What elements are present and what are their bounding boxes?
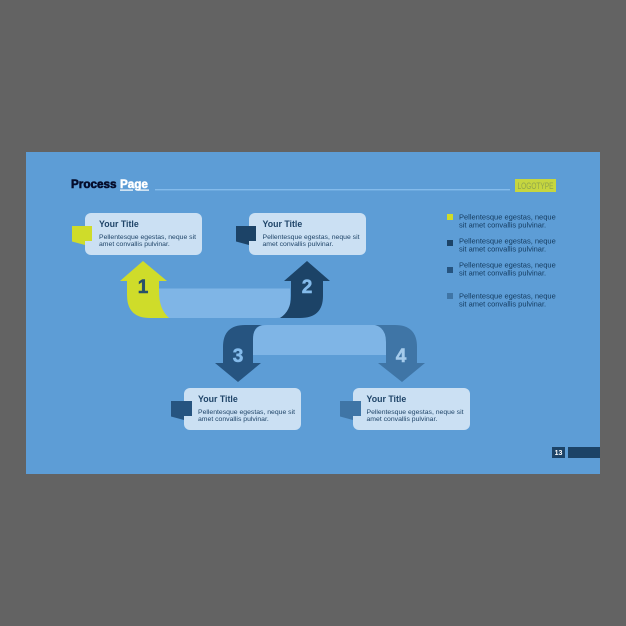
card 1: Your Title xyxy=(99,219,139,229)
card 2: Pellentesque egestas, neque sit xyxy=(262,234,360,241)
card 1: amet convallis pulvinar. xyxy=(99,241,170,248)
arrow 4: 4 xyxy=(396,346,407,367)
arrow 4 xyxy=(375,325,425,382)
title: Page xyxy=(120,178,148,191)
card 3 xyxy=(171,388,301,430)
card 2: amet convallis pulvinar. xyxy=(262,241,333,248)
arrow 2 xyxy=(280,261,330,318)
arrow 3: 3 xyxy=(233,346,243,367)
legend item 4: Pellentesque egestas, neque xyxy=(459,292,556,300)
arrow 3 xyxy=(215,325,262,382)
logotype badge: LOGOTYPE xyxy=(518,181,554,192)
arrow 1: 1 xyxy=(138,277,149,298)
title: Process xyxy=(71,178,117,191)
legend item 1 xyxy=(447,212,556,230)
card 1 xyxy=(72,213,202,255)
card 4: Pellentesque egestas, neque sit xyxy=(366,409,464,416)
legend item 1: sit amet convallis pulvinar. xyxy=(459,220,546,230)
flag icon 1 xyxy=(72,226,92,245)
footer bar xyxy=(568,447,600,458)
legend item 3: sit amet convallis pulvinar. xyxy=(459,268,546,278)
logotype badge xyxy=(515,179,556,192)
card 2 xyxy=(236,213,366,255)
legend item 2 xyxy=(447,236,556,254)
legend xyxy=(447,212,556,308)
legend item 2: sit amet convallis pulvinar. xyxy=(459,244,546,254)
arrow 1 xyxy=(120,261,169,318)
slide panel xyxy=(26,152,600,474)
arrow 2: 2 xyxy=(302,277,312,298)
card 3: amet convallis pulvinar. xyxy=(198,416,269,423)
page number: 13 xyxy=(555,450,562,457)
card 3: Your Title xyxy=(198,394,238,404)
legend item 3 xyxy=(447,260,556,278)
page number xyxy=(552,447,565,458)
legend item 3: Pellentesque egestas, neque xyxy=(459,260,556,270)
lower connecting band xyxy=(253,325,390,355)
legend item 4: sit amet convallis pulvinar. xyxy=(459,300,546,308)
legend item 2: Pellentesque egestas, neque xyxy=(459,236,556,246)
legend item 1: Pellentesque egestas, neque xyxy=(459,212,556,222)
flag icon 4 xyxy=(340,401,361,420)
flag icon 3 xyxy=(171,401,192,420)
card 4: Your Title xyxy=(366,394,406,404)
title xyxy=(71,178,149,191)
card 4 xyxy=(340,388,470,430)
card 2: Your Title xyxy=(262,219,302,229)
legend item 4 xyxy=(447,292,556,308)
upper connecting band xyxy=(155,288,290,318)
card 3: Pellentesque egestas, neque sit xyxy=(198,409,295,416)
flag icon 2 xyxy=(236,226,256,245)
card 1: Pellentesque egestas, neque sit xyxy=(99,234,196,241)
card 4: amet convallis pulvinar. xyxy=(366,416,437,423)
